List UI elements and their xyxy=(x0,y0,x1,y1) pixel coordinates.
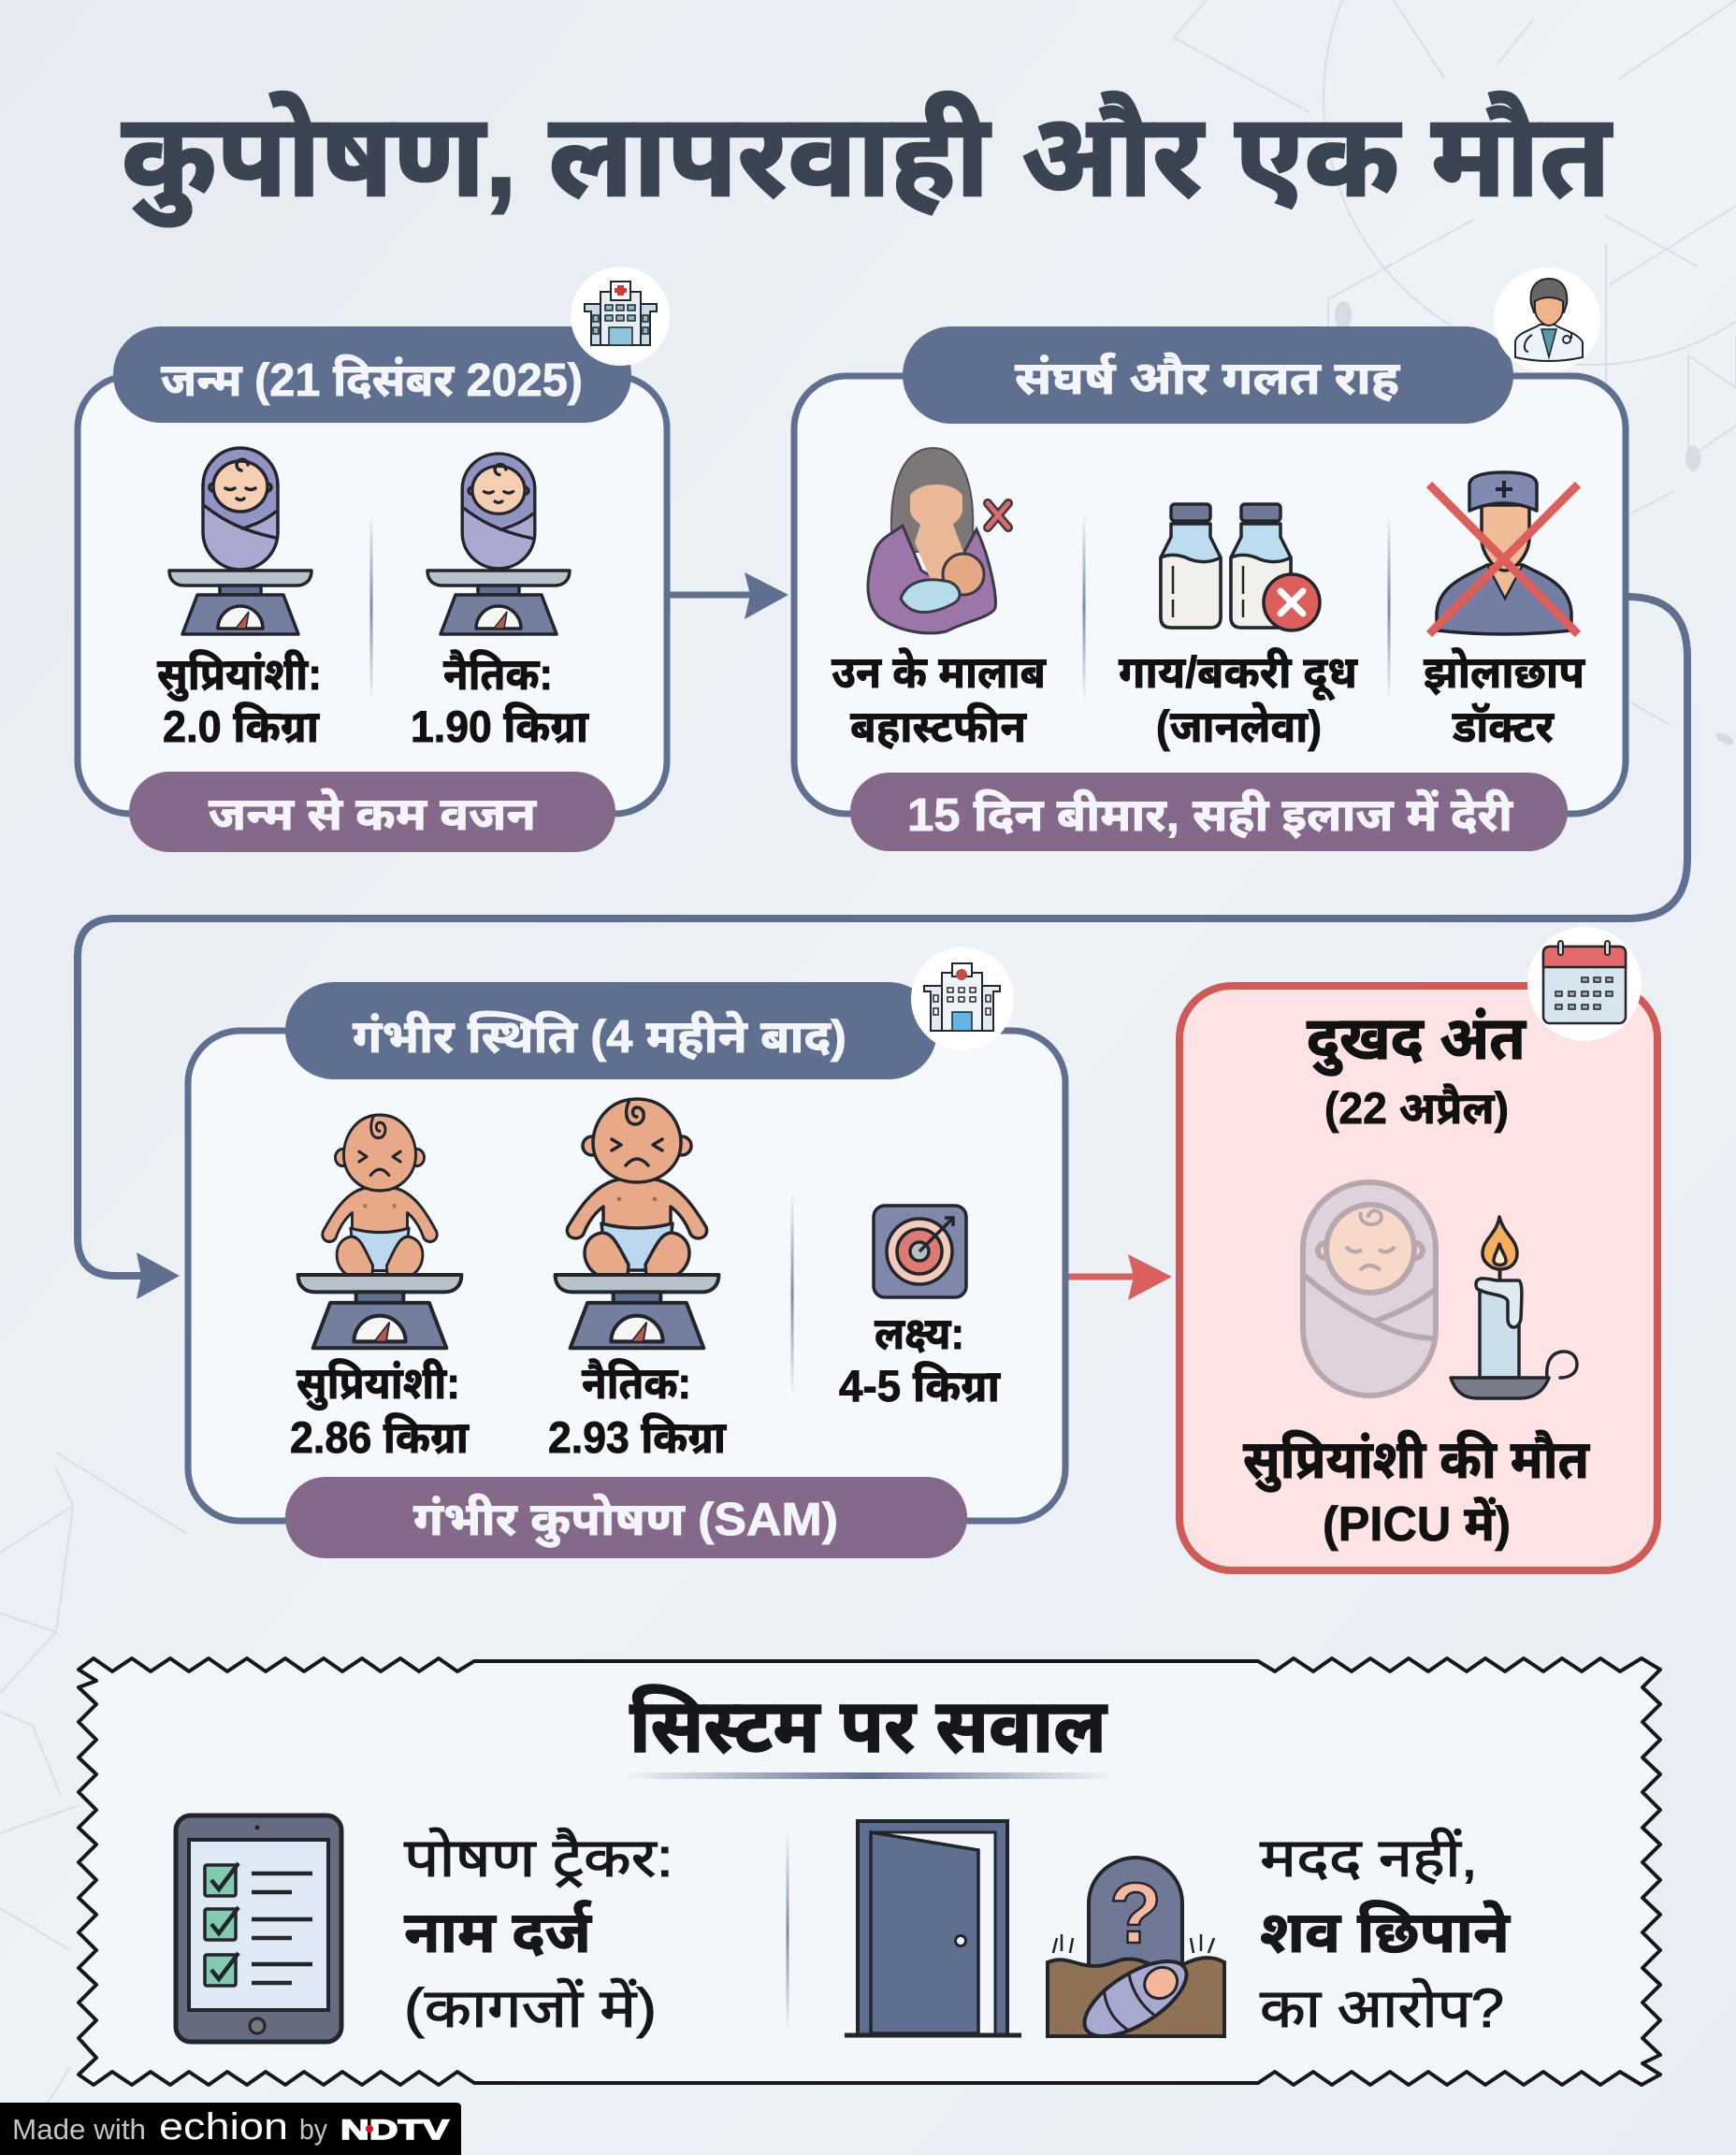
panel: questions on the system xyxy=(79,1658,1660,2085)
label: quack doctor: डॉक्टर xyxy=(1452,701,1555,751)
label: target weight xyxy=(839,1309,1001,1410)
label: breastfeeding: उन के मालाब xyxy=(832,647,1047,697)
badge: SAM: गंभीर कुपोषण (SAM) xyxy=(413,1493,838,1549)
badge: 15 days ill xyxy=(850,773,1568,851)
text: no help, allegation: शव छिपाने xyxy=(1260,1899,1512,1965)
icon: grave with question mark xyxy=(1048,1858,1224,2051)
text: nutrition tracker: पोषण ट्रैकर: xyxy=(404,1828,673,1888)
label: Naitik birth weight xyxy=(411,649,589,751)
label: target weight: 4-5 किग्रा xyxy=(839,1361,1001,1410)
badge: low birth weight: जन्म से कम वजन xyxy=(209,788,537,840)
label: death: (PICU में) xyxy=(1323,1497,1511,1552)
label: quack doctor xyxy=(1424,647,1585,751)
icon: tablet checklist xyxy=(176,1815,341,2042)
label: Naitik birth weight: नैतिक: xyxy=(443,649,553,699)
header: critical xyxy=(285,982,937,1079)
label: Supriyanshi birth weight xyxy=(157,649,322,751)
label: Supriyanshi birth weight: 2.0 किग्रा xyxy=(163,701,320,751)
title: कुपोषण, लापरवाही और एक मौत xyxy=(122,92,1613,226)
label: quack doctor: झोलाछाप xyxy=(1424,647,1585,697)
icon: breastfeeding mother xyxy=(868,448,1008,633)
icon: calendar xyxy=(1527,927,1642,1041)
text: no help, allegation: मदद नहीं, xyxy=(1260,1828,1478,1888)
label: death: सुप्रियांशी की मौत xyxy=(1243,1429,1591,1493)
icon: Naitik sitting on scale xyxy=(556,1099,718,1348)
badge: low birth weight xyxy=(129,772,615,852)
icon: hospital xyxy=(571,267,670,366)
label: Naitik weight: 2.93 किग्रा xyxy=(548,1412,727,1462)
label: Supriyanshi weight: 2.86 किग्रा xyxy=(290,1412,470,1462)
icon: candle xyxy=(1451,1217,1577,1398)
text: nutrition tracker: (कागजों में) xyxy=(404,1978,657,2039)
icon: baby 2 on scale xyxy=(427,454,570,634)
text: no help, allegation xyxy=(1260,1828,1512,2039)
heading: tragic end: दुखद अंत xyxy=(1307,1005,1526,1077)
label: breastfeeding xyxy=(832,647,1047,751)
icon: Supriyanshi sitting on scale xyxy=(298,1115,461,1348)
header: struggle xyxy=(903,326,1513,424)
label: cow goat milk: गाय/बकरी दूध xyxy=(1119,647,1359,701)
label: Supriyanshi weight: सुप्रियांशी: xyxy=(297,1358,460,1410)
label: breastfeeding: बहास्टफीन xyxy=(850,701,1027,751)
icon: hospital 2 xyxy=(911,947,1014,1050)
icon: grave with question mark: ? xyxy=(1109,1866,1162,1961)
icon: swaddled baby xyxy=(1303,1182,1437,1396)
connector: panel 2 to panel 3 arrow xyxy=(78,597,1687,1299)
panel: struggle xyxy=(794,268,1626,851)
label: Supriyanshi weight xyxy=(290,1358,470,1462)
header: birth xyxy=(113,326,631,423)
label: cow goat milk xyxy=(1119,647,1359,751)
header: struggle: संघर्ष और गलत राह xyxy=(1015,352,1400,404)
badge: made with echion by NDTV: by xyxy=(299,2113,327,2146)
panel: critical condition xyxy=(188,947,1065,1558)
label: target weight: लक्ष्य: xyxy=(875,1309,964,1358)
label: Naitik weight: नैतिक: xyxy=(582,1358,691,1408)
header: birth: जन्म (21 दिसंबर 2025) xyxy=(161,354,583,406)
heading: questions on the system: सिस्टम पर सवाल xyxy=(629,1685,1108,1768)
badge: made with echion by NDTV: echion xyxy=(159,2106,288,2148)
label: cow goat milk: (जानलेवा) xyxy=(1156,701,1322,751)
icon: doctor xyxy=(1494,268,1600,372)
connector: panel 3 to panel 4 arrow xyxy=(1065,1254,1172,1300)
badge: 15 days ill: 15 दिन बीमार, सही इलाज में देरी xyxy=(907,788,1514,841)
text: nutrition tracker: नाम दर्ज xyxy=(404,1900,592,1965)
panel: birth xyxy=(78,267,670,852)
badge: SAM xyxy=(285,1477,967,1558)
label: Naitik weight xyxy=(548,1358,727,1462)
label: Naitik birth weight: 1.90 किग्रा xyxy=(411,701,589,751)
badge: made with echion by NDTV: Made with xyxy=(12,2113,146,2146)
heading: tragic end: (22 अप्रैल) xyxy=(1324,1083,1509,1133)
icon: open door xyxy=(845,1821,1021,2035)
icon: target xyxy=(874,1206,966,1297)
badge: made with echion by NDTV: NDTV xyxy=(340,2115,449,2146)
icon: baby 1 on scale xyxy=(169,448,311,634)
label: death xyxy=(1243,1429,1591,1552)
icon: crossed-out quack doctor xyxy=(1429,472,1578,634)
header: critical: गंभीर स्थिति (4 महीने बाद) xyxy=(353,1010,846,1063)
panel: tragic end xyxy=(1179,927,1657,1570)
icon: milk bottles xyxy=(1161,504,1320,630)
connector: panel 1 to panel 2 arrow xyxy=(670,572,788,619)
text: no help, allegation: का आरोप? xyxy=(1260,1978,1504,2039)
text: nutrition tracker xyxy=(404,1828,673,2039)
heading: tragic end xyxy=(1307,1005,1526,1133)
label: Supriyanshi birth weight: सुप्रियांशी: xyxy=(157,649,322,701)
badge: made with echion by NDTV xyxy=(0,2103,461,2155)
